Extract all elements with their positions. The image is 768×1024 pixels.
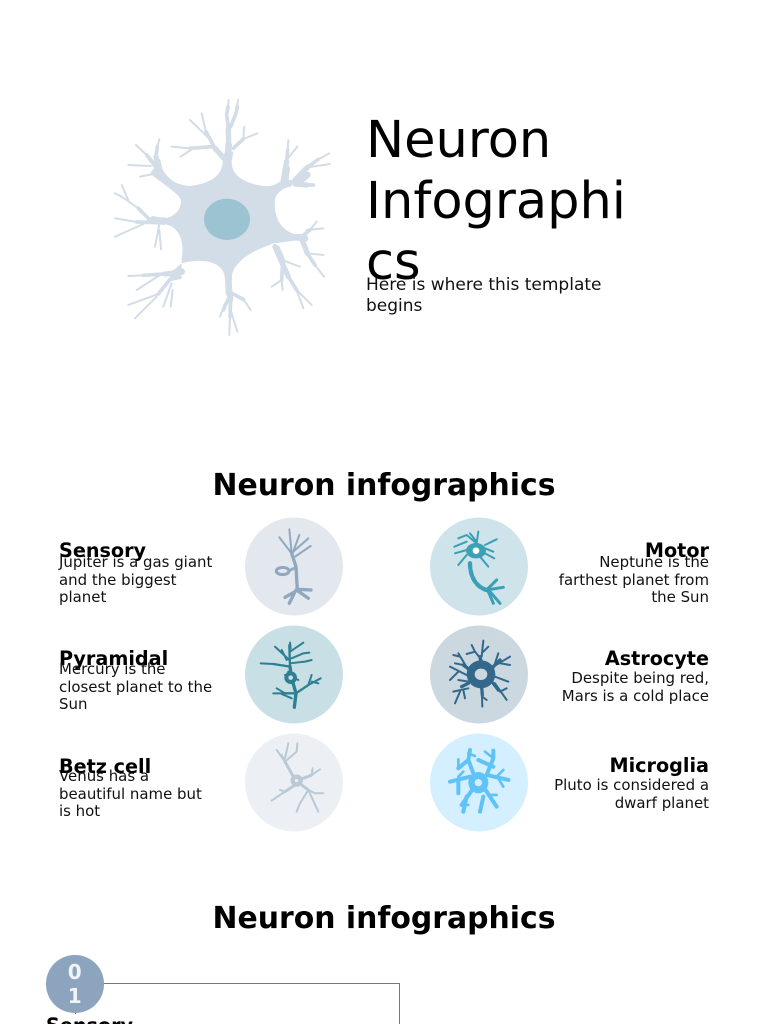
icon: betz cell	[245, 734, 343, 832]
text: Betz cell: Venus has a beautiful name but is hot	[59, 767, 202, 820]
icon: astrocyte	[430, 626, 528, 724]
neuron nucleus	[204, 199, 250, 240]
text: Astrocyte: Despite being red, Mars is a cold place	[562, 669, 709, 705]
text: Pyramidal: Pyramidal	[59, 647, 168, 670]
text: Microglia: Microglia	[609, 754, 709, 777]
icon: pyramidal neuron	[245, 626, 343, 724]
subtitle: Here is where this template begins	[366, 275, 602, 316]
text: Pyramidal: Mercury is the closest planet to the Sun	[59, 660, 212, 713]
text: Motor: Neptune is the farthest planet from the Sun	[559, 553, 709, 606]
panel outline: Sensory card	[75, 983, 400, 1024]
text: Microglia: Pluto is considered a dwarf planet	[554, 776, 709, 812]
text: Sensory: Jupiter is a gas giant and the biggest planet	[59, 553, 212, 606]
text: Astrocyte: Astrocyte	[605, 647, 709, 670]
text: Microglia	[554, 754, 709, 812]
section heading 2: Neuron infographics	[212, 901, 555, 936]
title: Infographi	[366, 172, 626, 231]
number badge 01: 0	[68, 960, 82, 984]
text: Motor: Motor	[645, 539, 709, 562]
neuron cell body	[150, 152, 300, 280]
text: Betz cell: Betz cell	[59, 755, 151, 778]
section heading 1: Neuron infographics	[212, 468, 555, 503]
text: Sensory: Sensory	[59, 539, 146, 562]
icon: sensory neuron	[245, 518, 343, 616]
number badge 01	[46, 955, 104, 1012]
number badge 01: 1	[68, 984, 82, 1008]
title: Neuron	[366, 111, 551, 170]
text: Astrocyte	[562, 647, 709, 705]
icon: microglia	[430, 734, 528, 832]
icon: motor neuron	[430, 518, 528, 616]
neuron dendrites	[115, 100, 330, 335]
title	[366, 111, 626, 292]
title: cs	[366, 233, 421, 292]
